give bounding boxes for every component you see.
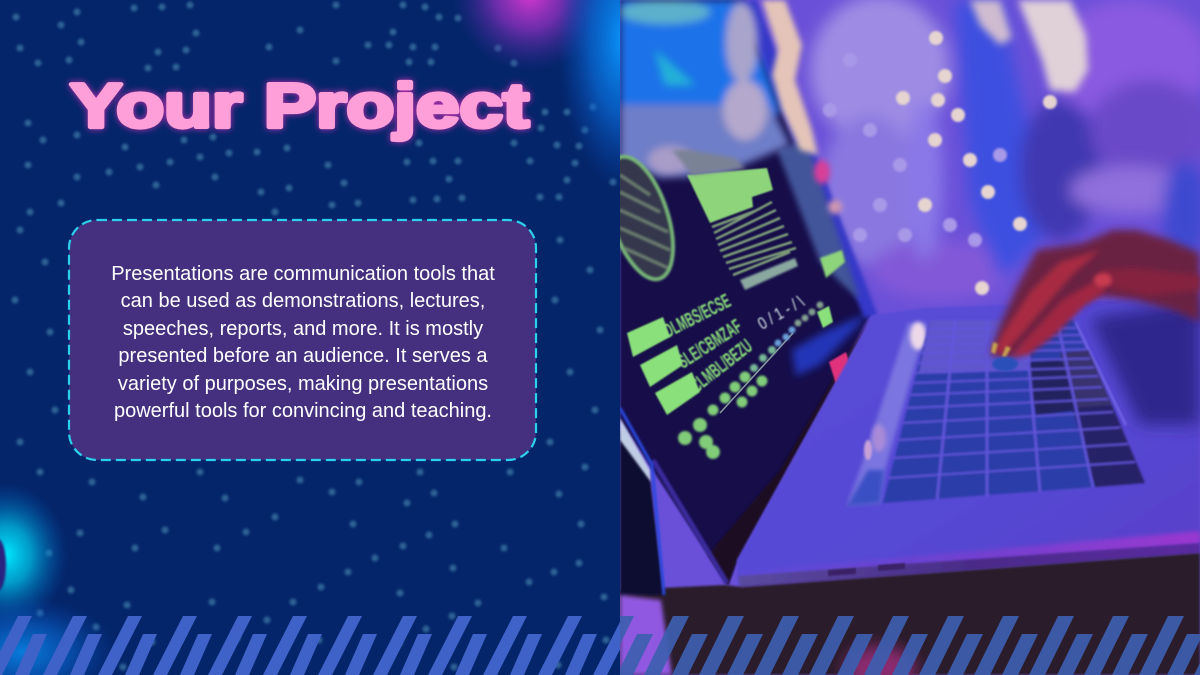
star dots: [15, 5, 613, 667]
screen labels: CLMBL/BEZU: [687, 335, 757, 397]
trackpad shade: [1090, 300, 1200, 425]
body text: speeches, reports, and more. It is mostly: [123, 318, 483, 340]
blue screen glow: [792, 314, 866, 376]
hinge dark wedge: [708, 318, 871, 585]
front edge: [774, 529, 1200, 572]
lid edge strip: [737, 0, 878, 318]
body text: powerful tools for convincing and teaching.: [114, 400, 492, 422]
key gaps columns: [937, 320, 1093, 500]
green data block: [687, 168, 773, 223]
bokeh: peach clusters: [970, 0, 1088, 92]
glow core: dark purple edge: [0, 539, 6, 591]
sidebar green end: [820, 250, 845, 278]
lilac patch bottom left: [620, 595, 672, 675]
sidebar panel: [777, 140, 860, 300]
data row footer: [740, 258, 798, 290]
peach column: [762, 0, 842, 214]
glow: blue top right: [562, 0, 620, 180]
finger one: [994, 250, 1100, 354]
small screen glyphs: 0 / 1 - / \: [754, 292, 807, 333]
speaker highlight top: [910, 322, 926, 350]
reflection on table: [844, 646, 916, 675]
blue edge line: [620, 408, 664, 595]
screen labels: [664, 292, 753, 392]
body text: [111, 263, 495, 422]
thin row line: [720, 333, 793, 413]
top haze: blue field: [620, 0, 790, 178]
diagonal stripes band: [0, 616, 1200, 675]
body text: can be used as demonstrations, lectures,: [121, 290, 485, 312]
body text: Presentations are communication tools that: [111, 263, 495, 285]
dark keys right: [1027, 360, 1107, 415]
panel: laptop photo: [594, 0, 1200, 675]
hand back: [990, 230, 1200, 358]
keyboard: [883, 320, 1145, 503]
green dot controls: [685, 425, 713, 452]
upper keys light: [919, 320, 1032, 372]
globe wireframe: [620, 154, 676, 283]
blue dots: [778, 330, 792, 343]
front lip: [738, 543, 1200, 587]
lid stand left: [620, 430, 664, 595]
green square: [817, 306, 833, 328]
glow: magenta top: [458, 0, 592, 66]
speaker highlight mid: [872, 424, 886, 452]
title: Your Project: [70, 72, 529, 141]
data rows: [712, 202, 796, 275]
haze over block top: [672, 150, 745, 175]
green dots middle: [713, 377, 762, 410]
glow: blue bottom left: [0, 604, 109, 675]
speaker highlight low: [864, 440, 872, 460]
speaker lower: [847, 470, 884, 506]
table surface: [620, 553, 1200, 675]
laptop screen: [594, 0, 878, 585]
bokeh dots: [903, 38, 1050, 288]
blue edge highlight: [620, 418, 651, 482]
lid edge line: [653, 460, 727, 583]
hand: [990, 230, 1200, 371]
trackpad edge: [1075, 322, 1126, 425]
finger three: [1100, 268, 1200, 296]
key gaps rows: [889, 328, 1135, 478]
nail tips: [991, 342, 1011, 358]
bokeh background: [810, 0, 1200, 300]
body text: presented before an audience. It serves a: [118, 345, 488, 367]
side ports: [828, 563, 905, 576]
finger two: [1012, 275, 1105, 356]
green label blocks: [627, 317, 670, 357]
panel: left background: [0, 0, 620, 675]
dark keys bottom right: [1073, 405, 1145, 487]
text panel: [69, 220, 536, 460]
screen labels: DLMBS/ECSE: [660, 290, 734, 342]
nail: [1094, 273, 1112, 287]
pale dots: [754, 350, 772, 368]
grey dots: [798, 305, 820, 323]
pressed key: [992, 357, 1018, 371]
laptop base: [737, 295, 1200, 584]
body text: variety of purposes, making presentations: [118, 373, 488, 395]
function pad: [1060, 350, 1112, 408]
screen labels: SLE/CBMZAF: [674, 316, 746, 373]
speaker bar reflection: [847, 323, 927, 505]
glow: cyan bottom left: [0, 488, 64, 620]
pink logo: [829, 352, 851, 384]
